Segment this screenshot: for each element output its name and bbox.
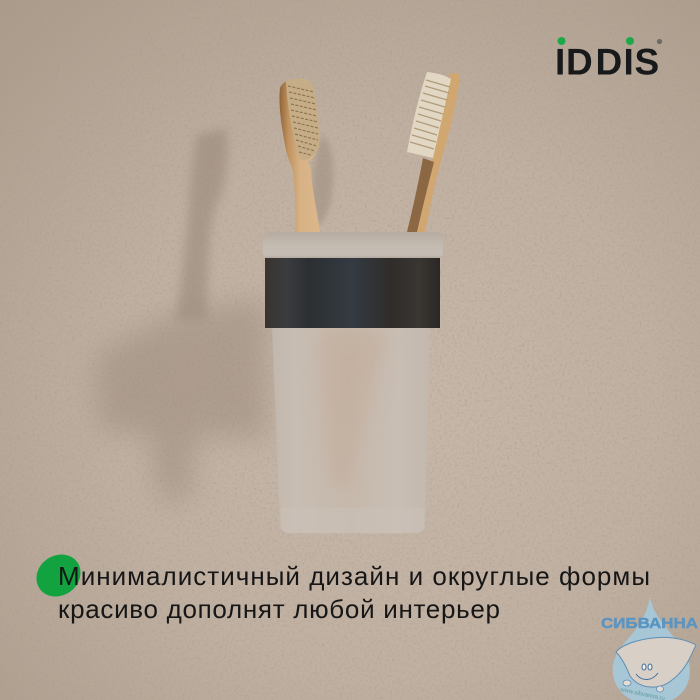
- cup and brush shadow on wall: [96, 128, 333, 500]
- Sibvanna watermark: [601, 597, 698, 700]
- caption text: красиво дополнят любой интерьер: [58, 594, 500, 624]
- brush shadow: [176, 128, 228, 320]
- logo dot right: [626, 37, 634, 45]
- IDDIS logo: IDDIS: [555, 42, 659, 82]
- watermark name: СИБВАННА: [601, 615, 698, 632]
- toothbrush left: [279, 78, 320, 232]
- brush handles seen through glass: [318, 330, 388, 493]
- black band: [265, 258, 440, 328]
- bathtub: [616, 637, 696, 687]
- frosted glass cup: [263, 232, 443, 533]
- caption text: [58, 561, 650, 624]
- cup shadow: [96, 298, 268, 500]
- tub face: [636, 664, 658, 680]
- cup base: [281, 508, 424, 533]
- cup body: [272, 326, 430, 533]
- tub legs: [623, 680, 664, 692]
- toothbrush right: [407, 72, 460, 232]
- registered mark: [657, 39, 662, 44]
- logo dot left: [558, 37, 566, 45]
- green accent blob: [28, 546, 89, 605]
- water drop: [613, 597, 690, 700]
- caption text: Минималистичный дизайн и округлые формы: [58, 561, 650, 591]
- near shadow: [312, 135, 333, 226]
- cup rim: [263, 232, 443, 259]
